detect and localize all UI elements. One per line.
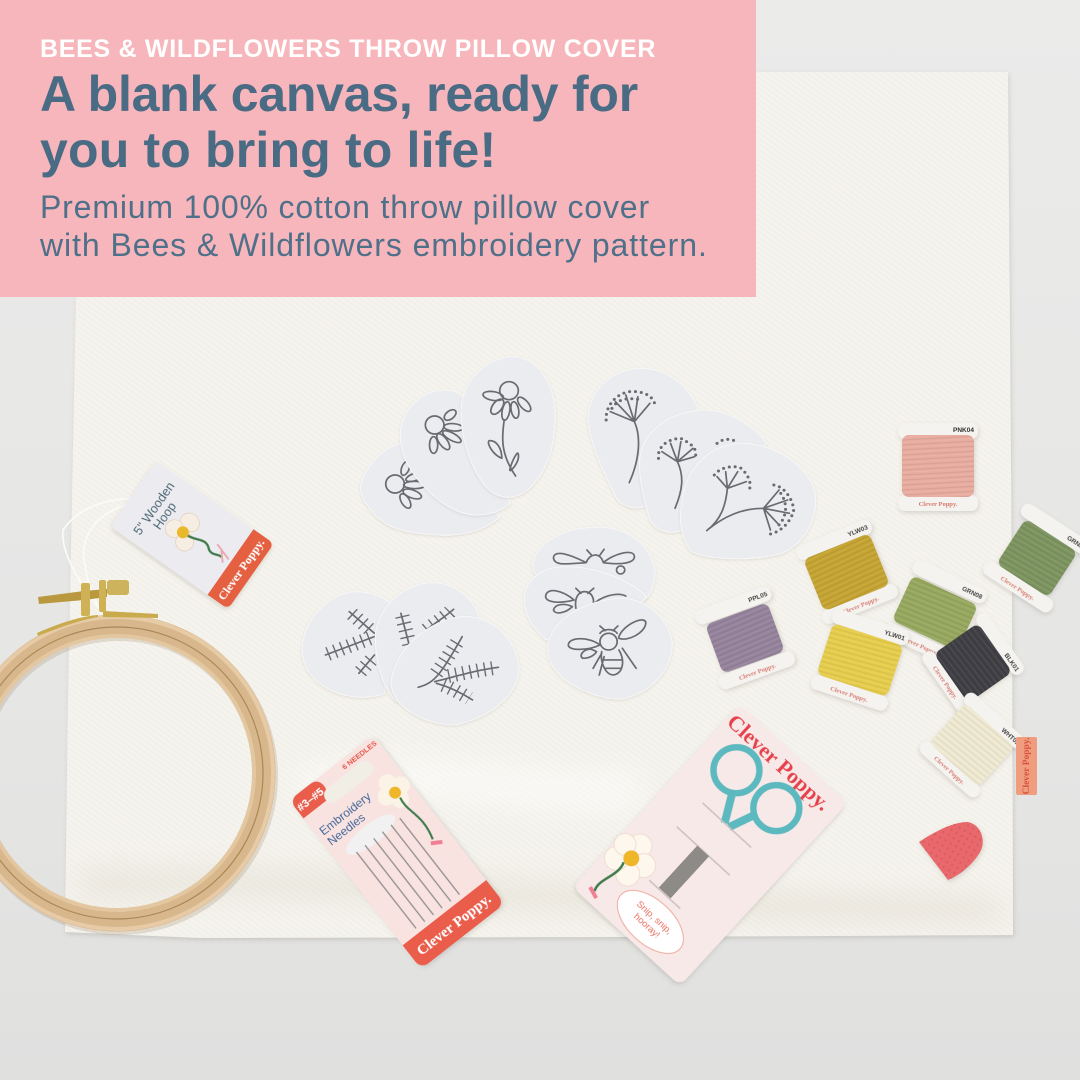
orange zipper tag: Clever Poppy. [1022, 738, 1032, 794]
header panel [0, 0, 756, 297]
snips scissors card [572, 704, 848, 986]
thread bobbin: sage GRN: Clever Poppy. [999, 575, 1036, 602]
main heading: A blank canvas, ready for [40, 66, 638, 122]
wooden hoop tag: Clever Poppy. [215, 536, 267, 603]
thread bobbin: olive GRN08 [881, 558, 989, 668]
thread bobbin: yellow YLW01 [809, 608, 911, 712]
thread bobbin: mustard YLW03: YLW03 [847, 524, 869, 539]
thread bobbin: sage GRN [981, 501, 1080, 615]
daisy patch set [361, 357, 555, 535]
thread bobbin: cream WHT02: WHT02 [1000, 727, 1021, 747]
teal scissor handles [688, 738, 810, 858]
thread bobbin: black BLK01: BLK01 [1002, 652, 1020, 673]
description: with Bees & Wildflowers embroidery pattern. [40, 227, 708, 263]
wooden hoop tag: Hoop [151, 500, 179, 532]
pillow cover [60, 70, 1020, 940]
eyebrow heading: BEES & WILDFLOWERS THROW PILLOW COVER [40, 35, 656, 63]
dill flower patch set [588, 368, 816, 559]
snips scissors card: Snip, snip, [634, 899, 674, 937]
brass tightening screw [37, 580, 158, 636]
main heading [40, 66, 638, 178]
embroidery needles package: Needles [325, 810, 368, 848]
thread bobbin: olive GRN08: Clever Poppy. [900, 635, 939, 658]
fabric pattern patches [302, 357, 816, 725]
embroidery needles package [289, 735, 505, 969]
embroidery needles package: #3–#5 [295, 786, 327, 814]
thread bobbin: pink PNK04: Clever Poppy. [919, 501, 958, 508]
snips scissors card: Clever Poppy. [722, 709, 836, 816]
thread bobbin: purple PPL05: Clever Poppy. [738, 662, 777, 682]
thread bobbin: cream WHT02: Clever Poppy. [932, 755, 966, 786]
thread bobbin: olive GRN08: GRN08 [961, 586, 984, 601]
wooden hoop tag [110, 461, 274, 609]
thread bobbin: pink PNK04 [898, 423, 978, 511]
thread bobbin: purple PPL05: PPL05 [747, 591, 769, 604]
thread bobbin: yellow YLW01: YLW01 [883, 629, 906, 643]
snips scissors card: hooray! [631, 911, 662, 941]
thread bobbin: yellow YLW01: Clever Poppy. [829, 685, 869, 704]
bee patch set [524, 527, 672, 699]
wooden hoop tag: 5" Wooden [131, 480, 178, 538]
thread bobbin: mustard YLW03: Clever Poppy. [841, 595, 880, 616]
thread bobbin: cream WHT02 [917, 690, 1027, 800]
embroidery needles package: 6 NEEDLES [340, 739, 379, 772]
orange zipper tag [1016, 737, 1037, 795]
thread bobbin: black BLK01 [920, 611, 1026, 715]
embroidery hoop [0, 580, 273, 929]
embroidery needles package: Clever Poppy. [414, 891, 495, 959]
main heading: you to bring to life! [40, 122, 496, 178]
thread bobbin: purple PPL05 [693, 585, 797, 691]
thread bobbin: black BLK01: Clever Poppy. [931, 665, 959, 701]
cotton thread tail [63, 499, 147, 612]
description: Premium 100% cotton throw pillow cover [40, 189, 650, 225]
thread bobbin: mustard YLW03 [794, 518, 900, 626]
embroidery needles package: Embroidery [317, 789, 374, 838]
fern patch set [302, 583, 519, 725]
description [40, 189, 708, 263]
thread bobbin: pink PNK04: PNK04 [953, 427, 974, 434]
thimble [919, 822, 983, 880]
